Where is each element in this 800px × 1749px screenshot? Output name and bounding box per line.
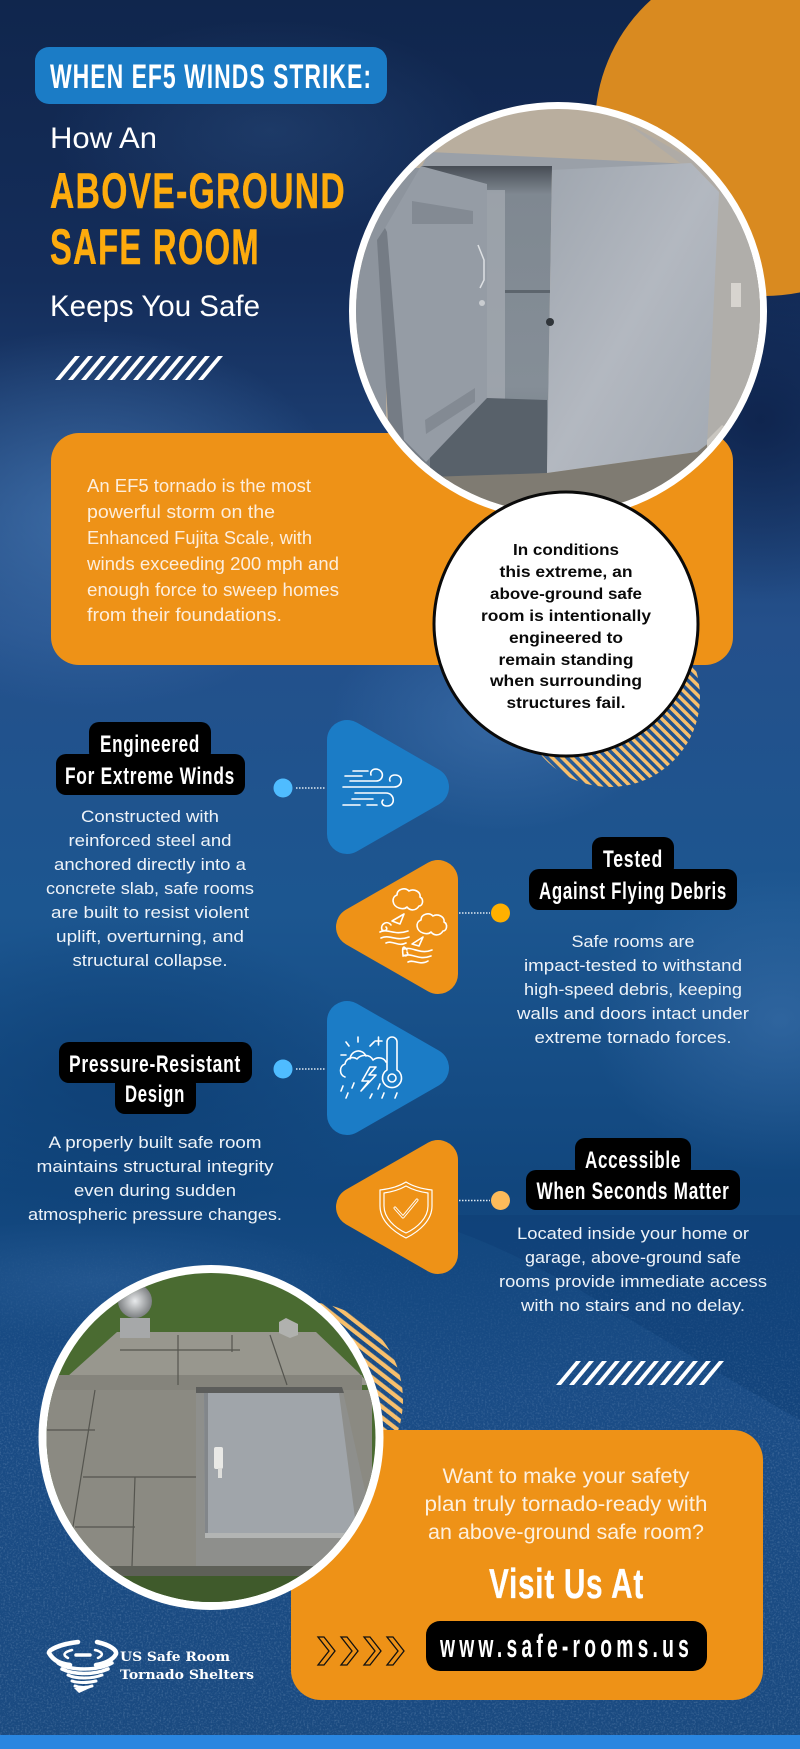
photo: above-ground safe room interior door xyxy=(349,102,767,510)
item: accessible when seconds matter xyxy=(356,1138,767,1315)
decorative slashes xyxy=(55,356,223,380)
heading label: when EF5 winds strike xyxy=(35,47,387,104)
panel: EF5 explanation: Enhanced Fujita Scale, with xyxy=(87,528,312,548)
body text: A properly built safe room xyxy=(48,1133,262,1152)
question text: plan truly tornado-ready with xyxy=(424,1493,708,1516)
callout: engineered to remain standing: engineered to xyxy=(509,630,623,647)
visit heading: Visit Us At xyxy=(489,1560,644,1607)
body text: are built to resist violent xyxy=(51,903,249,922)
callout: engineered to remain standing: when surrounding xyxy=(489,673,642,690)
question text: Want to make your safety xyxy=(442,1465,690,1488)
panel: EF5 explanation: enough force to sweep homes xyxy=(87,580,339,600)
connector dot xyxy=(274,778,326,798)
heading tag xyxy=(526,1138,740,1210)
heading tag: Against Flying Debris xyxy=(539,878,727,905)
heading tag: Engineered xyxy=(100,731,200,758)
body text: Safe rooms are xyxy=(572,932,694,951)
heading tag: Accessible xyxy=(585,1147,681,1174)
connector dot xyxy=(274,1060,326,1078)
body text: extreme tornado forces. xyxy=(534,1028,732,1047)
body text: Located inside your home or xyxy=(517,1224,749,1243)
title: ABOVE-GROUND xyxy=(50,163,346,219)
title: SAFE ROOM xyxy=(50,219,260,275)
heading tag: Design xyxy=(125,1081,185,1108)
panel: EF5 explanation: powerful storm on the xyxy=(87,502,275,522)
body text: even during sudden xyxy=(74,1181,236,1200)
callout: engineered to remain standing: this extreme, an xyxy=(500,564,632,581)
heading tag: Tested xyxy=(603,846,663,873)
body text: structural collapse. xyxy=(72,951,228,970)
panel: EF5 explanation: An EF5 tornado is the most xyxy=(87,476,311,496)
heading tag xyxy=(56,722,245,795)
title xyxy=(50,122,346,323)
body text: high-speed debris, keeping xyxy=(524,980,742,999)
item: pressure-resistant design xyxy=(28,1021,429,1224)
body text: Constructed with xyxy=(81,807,219,826)
body text xyxy=(516,932,749,1047)
body text: with no stairs and no delay. xyxy=(520,1296,745,1315)
website pill xyxy=(426,1621,707,1671)
heading tag xyxy=(529,837,737,910)
heading tag: For Extreme Winds xyxy=(65,763,235,790)
item: tested against flying debris xyxy=(356,837,749,1047)
icon: shield on orange triangle xyxy=(356,1160,438,1254)
question text: an above-ground safe room? xyxy=(428,1521,704,1544)
icon: debris on orange triangle xyxy=(356,880,447,974)
body text: reinforced steel and xyxy=(68,831,232,850)
striped circle behind lower photo xyxy=(207,1302,403,1498)
footer bar xyxy=(0,1735,800,1749)
callout: engineered to remain standing: In conditions xyxy=(513,542,619,559)
logo: US Safe Room Tornado Shelters: Tornado Shelters xyxy=(120,1668,254,1683)
title: How An xyxy=(50,122,157,155)
body text: walls and doors intact under xyxy=(516,1004,749,1023)
decorative slashes xyxy=(556,1361,724,1385)
callout: engineered to remain standing: above-ground safe xyxy=(490,586,642,603)
body text: uplift, overturning, and xyxy=(56,927,244,946)
connector dot xyxy=(459,904,510,922)
panel: EF5 explanation: from their foundations. xyxy=(87,605,282,625)
striped half circle behind callout xyxy=(520,607,700,787)
panel: call to action xyxy=(291,1430,763,1700)
connector dot xyxy=(459,1191,510,1210)
heading label: when EF5 winds strike: WHEN EF5 WINDS STRIKE: xyxy=(50,58,372,96)
decorative orange circle top right xyxy=(595,0,800,296)
logo: US Safe Room Tornado Shelters xyxy=(49,1642,254,1693)
body text: rooms provide immediate access xyxy=(499,1272,767,1291)
panel: EF5 explanation xyxy=(51,433,733,665)
panel: EF5 explanation: winds exceeding 200 mph and xyxy=(86,554,339,574)
body text: garage, above-ground safe xyxy=(525,1248,741,1267)
body text: concrete slab, safe rooms xyxy=(46,879,254,898)
body text xyxy=(499,1224,767,1315)
item: engineered for extreme winds xyxy=(46,722,429,970)
body text: impact-tested to withstand xyxy=(524,956,742,975)
callout: engineered to remain standing: structures fail. xyxy=(506,695,626,712)
question text xyxy=(424,1465,708,1544)
photo: storm shelter door in concrete slab xyxy=(38,1265,385,1612)
heading tag: When Seconds Matter xyxy=(536,1178,730,1205)
icon: chevrons xyxy=(318,1637,404,1665)
callout: engineered to remain standing xyxy=(434,492,698,756)
heading tag xyxy=(59,1042,252,1114)
callout: engineered to remain standing: room is intentionally xyxy=(481,608,651,625)
icon: storm and thermometer on blue triangle xyxy=(340,1021,429,1115)
body text: anchored directly into a xyxy=(54,855,247,874)
body text xyxy=(28,1133,282,1224)
logo: US Safe Room Tornado Shelters: US Safe Room xyxy=(120,1650,230,1665)
callout: engineered to remain standing: remain standing xyxy=(498,652,634,669)
title: Keeps You Safe xyxy=(50,290,260,323)
heading tag: Pressure-Resistant xyxy=(69,1051,241,1078)
body text xyxy=(46,807,254,970)
body text: maintains structural integrity xyxy=(36,1157,274,1176)
body text: atmospheric pressure changes. xyxy=(28,1205,282,1224)
icon: wind on blue triangle xyxy=(343,740,429,834)
icon: tornado xyxy=(49,1642,116,1688)
